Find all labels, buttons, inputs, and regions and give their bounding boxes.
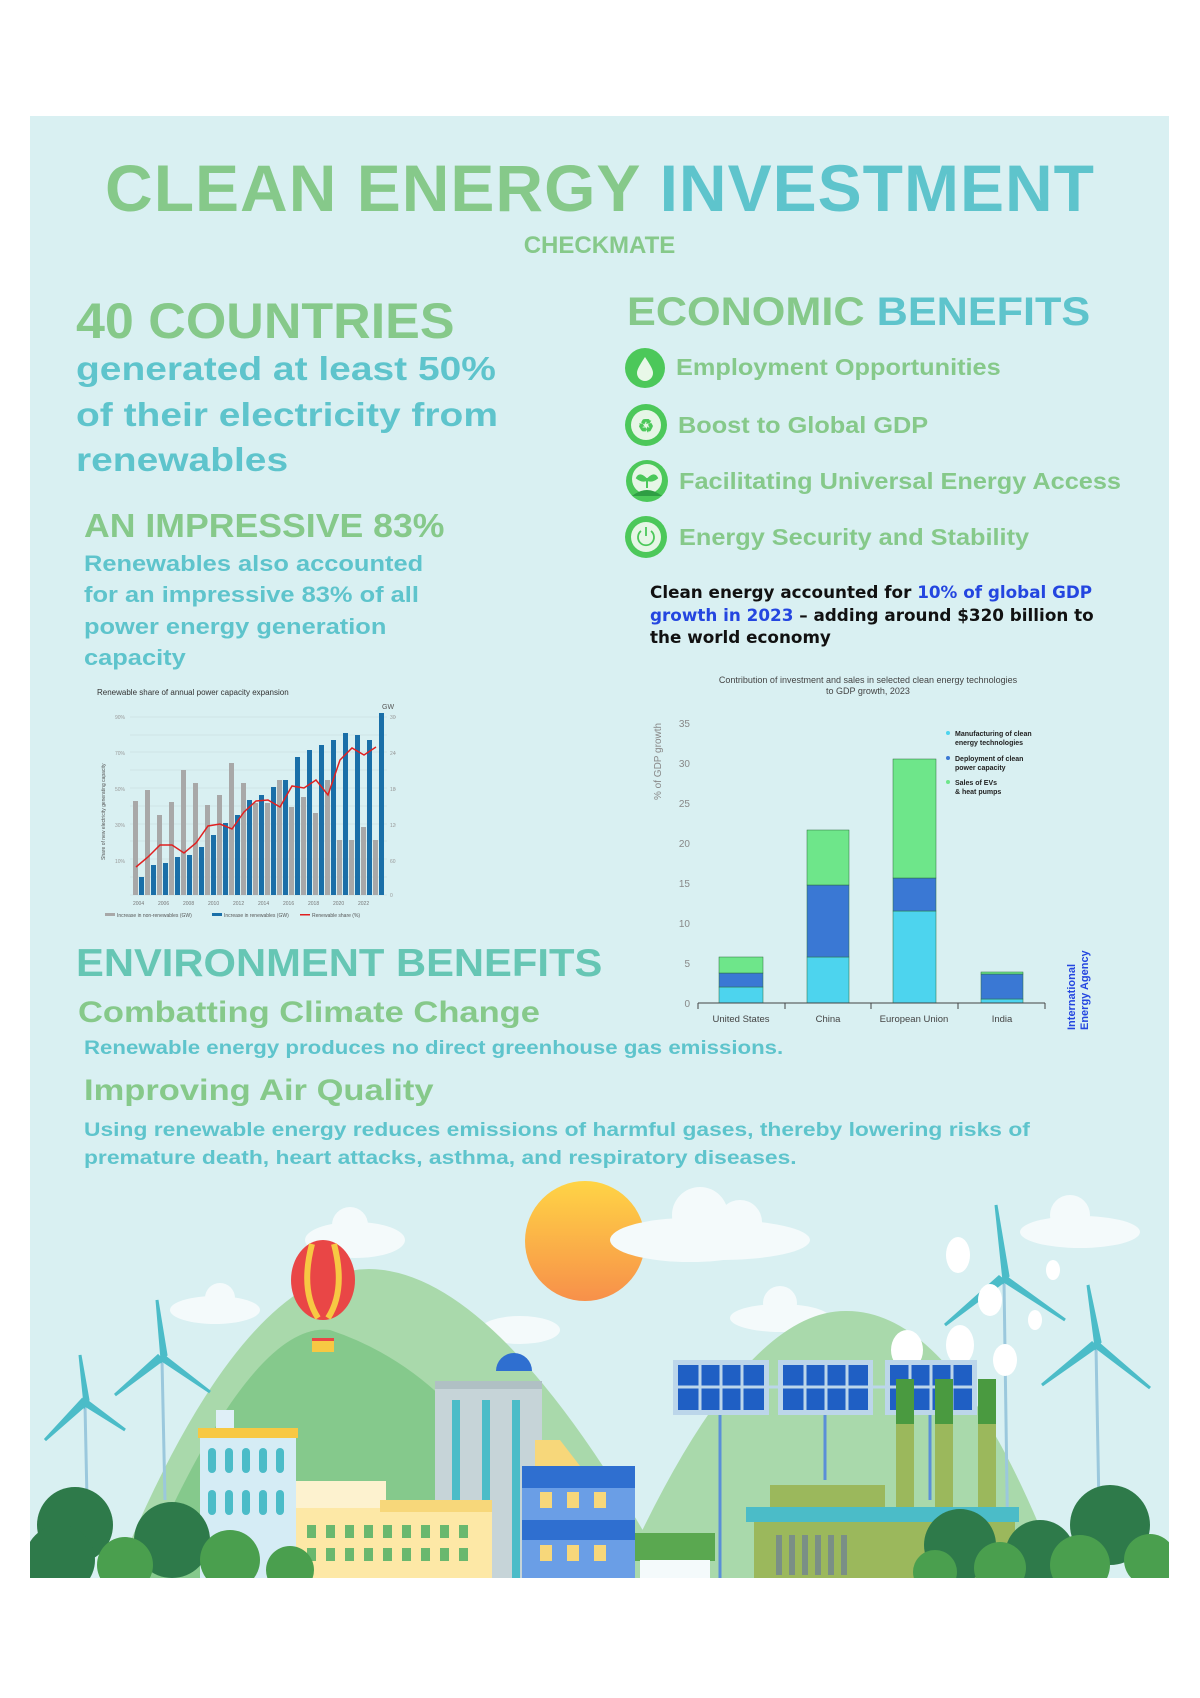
item: security: Energy Security and Stability bbox=[679, 524, 1029, 550]
chart: GDP growth contribution: 10 bbox=[679, 919, 690, 930]
chart: renewable share of capacity expansion: 2004 bbox=[133, 901, 144, 907]
text: air quality bbox=[84, 1119, 1030, 1169]
subheading: air quality: Improving Air Quality bbox=[84, 1074, 434, 1107]
chart: renewable share of capacity expansion: 70% bbox=[115, 751, 126, 757]
text: 50% electricity: generated at least 50% bbox=[76, 350, 496, 387]
chart: renewable share of capacity expansion: 2008 bbox=[183, 901, 194, 907]
text: renewables 83%: Renewables also accounted bbox=[84, 551, 423, 576]
smoke bbox=[891, 1237, 1060, 1376]
chart: renewable share of capacity expansion: GW bbox=[382, 704, 394, 711]
chart: renewable share of capacity expansion: Renewable share of annual power capacity expansion bbox=[97, 688, 289, 697]
chart: GDP growth contribution: 15 bbox=[679, 879, 690, 890]
chart: renewable share of capacity expansion: 60 bbox=[390, 859, 396, 865]
trees bbox=[25, 1485, 1150, 1595]
icon: drop bbox=[625, 348, 665, 388]
text: air quality: Using renewable energy reduces emissions of harmful gases, thereby lowering risks of bbox=[84, 1119, 1030, 1141]
text: GDP contribution: growth in 2023 – adding around $320 billion to bbox=[650, 604, 1094, 624]
chart: GDP growth contribution: to GDP growth, 2023 bbox=[826, 686, 910, 696]
chart: renewable share of capacity expansion: Share of new electricity generating capacity bbox=[101, 763, 107, 860]
clouds bbox=[170, 1187, 1140, 1344]
chart: GDP growth contribution: power capacity bbox=[955, 765, 1006, 772]
icon: power bbox=[625, 516, 667, 558]
chart: GDP growth contribution: 35 bbox=[679, 719, 690, 730]
icon: recycle: ♻ bbox=[638, 416, 654, 436]
text: air quality: premature death, heart attacks, asthma, and respiratory diseases. bbox=[84, 1147, 797, 1169]
chart: renewable share of capacity expansion: 0 bbox=[390, 893, 393, 899]
chart: GDP growth contribution bbox=[653, 675, 1091, 1030]
chart: renewable share of capacity expansion: 2016 bbox=[283, 901, 294, 907]
text: 50% electricity: renewables bbox=[76, 441, 288, 478]
text: no emissions: Renewable energy produces no direct greenhouse gas emissions. bbox=[84, 1038, 783, 1059]
subheading: climate change: Combatting Climate Change bbox=[78, 996, 540, 1029]
text: renewables 83%: power energy generation bbox=[84, 614, 386, 639]
item: GDP: Boost to Global GDP bbox=[678, 412, 928, 438]
text: GDP contribution: Clean energy accounted for 10% of global GDP bbox=[650, 582, 1092, 602]
heading: impressive 83%: AN IMPRESSIVE 83% bbox=[84, 507, 444, 544]
chart: GDP growth contribution: Sales of EVs bbox=[955, 780, 997, 787]
chart: GDP growth contribution: Energy Agency bbox=[1079, 949, 1091, 1030]
wind turbines bbox=[45, 1205, 1150, 1560]
chart: renewable share of capacity expansion: 90% bbox=[115, 715, 126, 721]
heading: economic benefits: ECONOMIC BENEFITS bbox=[627, 290, 1090, 334]
text: renewables 83%: for an impressive 83% of all bbox=[84, 582, 419, 607]
chart: GDP growth contribution: Manufacturing of clean bbox=[955, 731, 1032, 738]
chart: renewable share of capacity expansion: 2020 bbox=[333, 901, 344, 907]
heading: 40 countries: 40 COUNTRIES bbox=[76, 293, 455, 349]
chart: renewable share of capacity expansion: 2012 bbox=[233, 901, 244, 907]
solar panels bbox=[673, 1360, 977, 1578]
chart: GDP growth contribution: European Union bbox=[880, 1014, 948, 1025]
chart: GDP growth contribution: China bbox=[816, 1014, 841, 1025]
item: energy access: Facilitating Universal Energy Access bbox=[679, 468, 1121, 494]
item: employment: Employment Opportunities bbox=[676, 354, 1001, 380]
chart: renewable share of capacity expansion: Increase in renewables (GW) bbox=[224, 913, 289, 919]
chart: GDP growth contribution: 25 bbox=[679, 799, 690, 810]
text: 50% electricity: of their electricity from bbox=[76, 396, 498, 432]
chart: renewable share of capacity expansion: Renewable share (%) bbox=[312, 913, 360, 919]
factory bbox=[746, 1379, 1019, 1578]
chart: GDP growth contribution: & heat pumps bbox=[955, 789, 1001, 796]
chart: GDP growth contribution: energy technologies bbox=[955, 740, 1023, 747]
chart: renewable share of capacity expansion: 2018 bbox=[308, 901, 319, 907]
chart: renewable share of capacity expansion: Increase in non-renewables (GW) bbox=[117, 913, 192, 919]
chart: GDP growth contribution: Contribution of investment and sales in selected clean energy technologies bbox=[719, 675, 1018, 685]
icon: sprout bbox=[626, 460, 668, 502]
text: GDP contribution bbox=[650, 582, 1094, 647]
icon: recycle bbox=[625, 404, 667, 446]
illustration: clean city landscape bbox=[30, 1181, 1169, 1578]
buildings bbox=[198, 1353, 715, 1578]
chart: GDP growth contribution: India bbox=[992, 1014, 1013, 1025]
text: 50% electricity bbox=[76, 350, 498, 478]
chart: renewable share of capacity expansion: 2010 bbox=[208, 901, 219, 907]
chart: renewable share of capacity expansion: 2014 bbox=[258, 901, 269, 907]
chart: GDP growth contribution: International bbox=[1066, 964, 1078, 1030]
text: GDP contribution: the world economy bbox=[650, 627, 831, 647]
text: renewables 83% bbox=[84, 551, 423, 670]
chart: renewable share of capacity expansion bbox=[97, 688, 396, 919]
chart: GDP growth contribution: United States bbox=[712, 1014, 770, 1025]
mountains bbox=[115, 1269, 670, 1578]
chart: renewable share of capacity expansion: 30% bbox=[115, 823, 126, 829]
chart: renewable share of capacity expansion: 2006 bbox=[158, 901, 169, 907]
chart: GDP growth contribution: Deployment of clean bbox=[955, 756, 1023, 763]
chart: renewable share of capacity expansion: 2022 bbox=[358, 901, 369, 907]
subtitle: CHECKMATE bbox=[524, 232, 675, 259]
chart: GDP growth contribution: 5 bbox=[684, 959, 690, 970]
title: CLEAN ENERGY INVESTMENT bbox=[105, 151, 1095, 225]
text: renewables 83%: capacity bbox=[84, 645, 186, 670]
heading: environment benefits: ENVIRONMENT BENEFITS bbox=[76, 942, 602, 985]
chart: renewable share of capacity expansion: 10% bbox=[115, 859, 126, 865]
chart: GDP growth contribution: 0 bbox=[684, 999, 690, 1010]
chart: GDP growth contribution: 20 bbox=[679, 839, 690, 850]
chart: renewable share of capacity expansion: 50% bbox=[115, 787, 126, 793]
list: economic benefits bbox=[625, 348, 1121, 558]
balloon bbox=[291, 1240, 355, 1352]
chart: GDP growth contribution: 30 bbox=[679, 759, 690, 770]
chart: GDP growth contribution: % of GDP growth bbox=[653, 723, 664, 800]
